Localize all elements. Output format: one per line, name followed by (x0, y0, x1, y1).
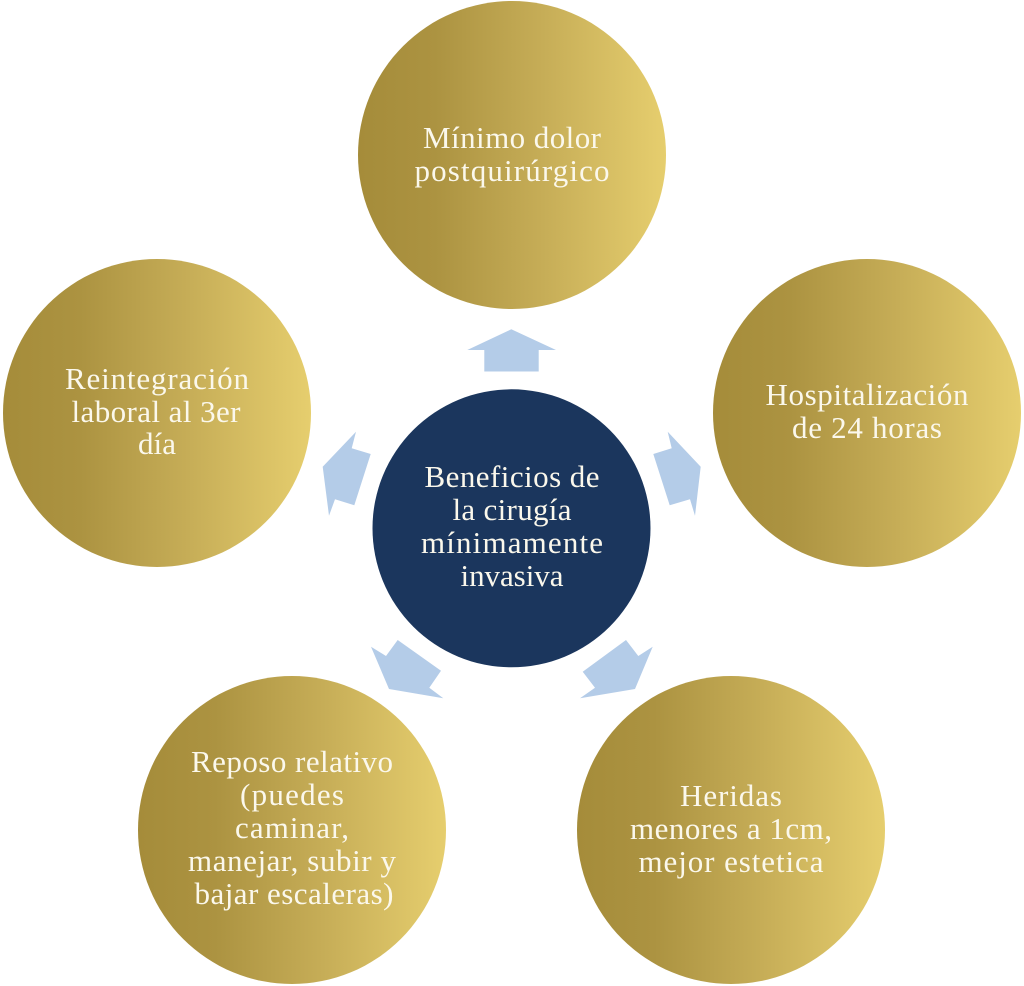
circle: Reintegración laboral: laboral al 3er (72, 394, 241, 429)
arrow: lower right (580, 640, 653, 698)
circle: Reposo relativo: bajar escaleras) (194, 876, 394, 911)
circle: Reintegración laboral: Reintegración (65, 361, 250, 396)
circle: Reposo relativo: manejar, subir y (188, 843, 396, 878)
circle: Reposo relativo: caminar, (235, 810, 349, 845)
circle: Mínimo dolor postquirúrgico (358, 1, 666, 309)
center circle: title: la cirugía (452, 492, 572, 527)
arrow: lower left (371, 640, 443, 698)
arrow: upper left (323, 432, 371, 516)
circle: Heridas menores a 1cm: Heridas (680, 778, 782, 813)
circle: Reposo relativo: Reposo relativo (191, 744, 393, 779)
circle: Heridas menores a 1cm: mejor estetica (638, 844, 824, 879)
circle: Reposo relativo (138, 676, 446, 984)
arrow: upper right (653, 432, 701, 516)
arrow: up (467, 329, 556, 372)
circle: Hospitalización de 24 horas (713, 259, 1021, 567)
center circle: title (372, 389, 650, 667)
circle: Heridas menores a 1cm (577, 676, 885, 984)
circle: Hospitalización de 24 horas: Hospitalización (766, 377, 969, 412)
circle: Heridas menores a 1cm: menores a 1cm, (630, 811, 832, 846)
center circle: title: invasiva (460, 558, 564, 593)
circle: Mínimo dolor postquirúrgico: postquirúrgico (414, 153, 610, 188)
center circle: title: mínimamente (421, 525, 603, 560)
center circle: title: Beneficios de (424, 459, 600, 494)
circle: Mínimo dolor postquirúrgico: Mínimo dolor (423, 120, 602, 155)
circle: Hospitalización de 24 horas: de 24 horas (792, 410, 942, 445)
circle: Reposo relativo: (puedes (240, 777, 344, 812)
circle: Reintegración laboral: día (138, 426, 176, 461)
circle: Reintegración laboral (3, 259, 311, 567)
